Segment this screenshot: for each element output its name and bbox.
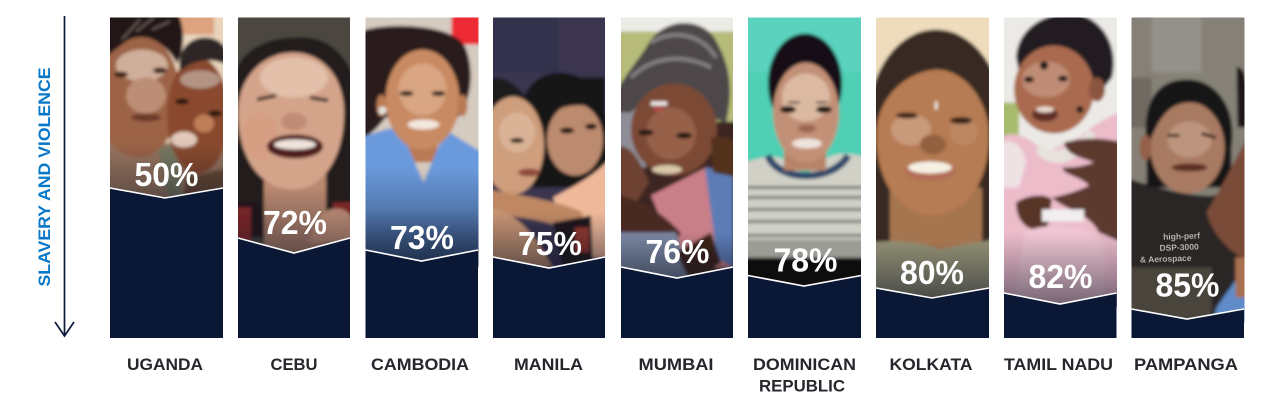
chevron line — [366, 250, 478, 261]
chevron line — [1132, 309, 1244, 319]
chevron line — [748, 276, 861, 286]
panel: Cebu — [233, 12, 358, 338]
value: 73%: 73% — [390, 219, 454, 256]
value: 75%: 75% — [518, 225, 582, 262]
label: Cebu: CEBU — [270, 355, 318, 374]
bar: Cebu 72% — [238, 238, 350, 338]
label: Mumbai: MUMBAI — [638, 355, 714, 374]
bar: Kolkata 80% — [876, 288, 989, 338]
shirt lettering: DSP-3000 — [1159, 242, 1199, 253]
photo: laughing child, Cebu — [238, 18, 350, 252]
photo: smiling woman, Kolkata — [876, 18, 989, 298]
label: Tamil Nadu: TAMIL NADU — [1004, 355, 1113, 374]
chevron line — [238, 238, 350, 253]
arrow: downward axis — [55, 16, 74, 336]
label: Dominican Republic: DOMINICAN — [753, 355, 856, 374]
value: 82%: 82% — [1028, 258, 1092, 295]
photo: two embracing children, Manila — [493, 18, 605, 268]
bar: Manila 75% — [493, 257, 605, 338]
photo: smiling girl in blue shirt, Cambodia — [366, 18, 478, 268]
photo: young woman against teal wall, Dominican Republic — [748, 18, 861, 286]
label: Uganda: UGANDA — [127, 355, 203, 374]
label: Pampanga: PAMPANGA — [1134, 355, 1238, 374]
chevron line — [621, 267, 733, 278]
value: 80%: 80% — [900, 254, 964, 291]
panel: Cambodia — [360, 12, 486, 338]
bar: Dominican Republic 78% — [748, 276, 861, 338]
bar: Uganda 50% — [110, 188, 223, 338]
shirt lettering: & Aerospace — [1140, 253, 1192, 265]
value: 50%: 50% — [134, 156, 198, 193]
chevron line — [493, 257, 605, 268]
label: Dominican Republic: REPUBLIC — [759, 376, 845, 396]
panel: Tamil Nadu — [999, 12, 1124, 338]
photo: woman and boy, Uganda — [110, 18, 223, 198]
bar: Pampanga 85% — [1132, 309, 1244, 338]
photo: smiling boy against concrete wall, Pampanga — [1132, 18, 1244, 322]
value: 76%: 76% — [646, 233, 710, 270]
photo: baby held up, Tamil Nadu — [1004, 18, 1117, 308]
panel: Mumbai — [616, 12, 741, 338]
panel: Uganda — [96, 12, 230, 338]
value: 72%: 72% — [263, 204, 327, 241]
value: 78%: 78% — [774, 242, 838, 278]
panel: Pampanga — [1126, 12, 1252, 338]
bar: Tamil Nadu 82% — [1004, 293, 1116, 338]
bar: Cambodia 73% — [366, 250, 478, 338]
label: Kolkata: KOLKATA — [890, 355, 972, 374]
value: 85%: 85% — [1156, 266, 1220, 304]
axis label: slavery and violence: SLAVERY AND VIOLENCE — [36, 68, 54, 286]
chevron line — [110, 188, 223, 198]
shirt lettering — [1139, 230, 1201, 265]
photo: smiling girl with bindi, Mumbai — [621, 18, 733, 278]
chevron line — [876, 288, 989, 298]
panel: Dominican Republic — [743, 12, 868, 338]
panel: Manila — [482, 12, 613, 338]
bar: Mumbai 76% — [621, 267, 733, 338]
shirt lettering: high-perf — [1163, 230, 1200, 242]
label: Manila: MANILA — [514, 355, 583, 374]
panel: Kolkata — [868, 12, 1004, 338]
chevron line — [1004, 293, 1116, 304]
label: Cambodia: CAMBODIA — [371, 355, 469, 374]
